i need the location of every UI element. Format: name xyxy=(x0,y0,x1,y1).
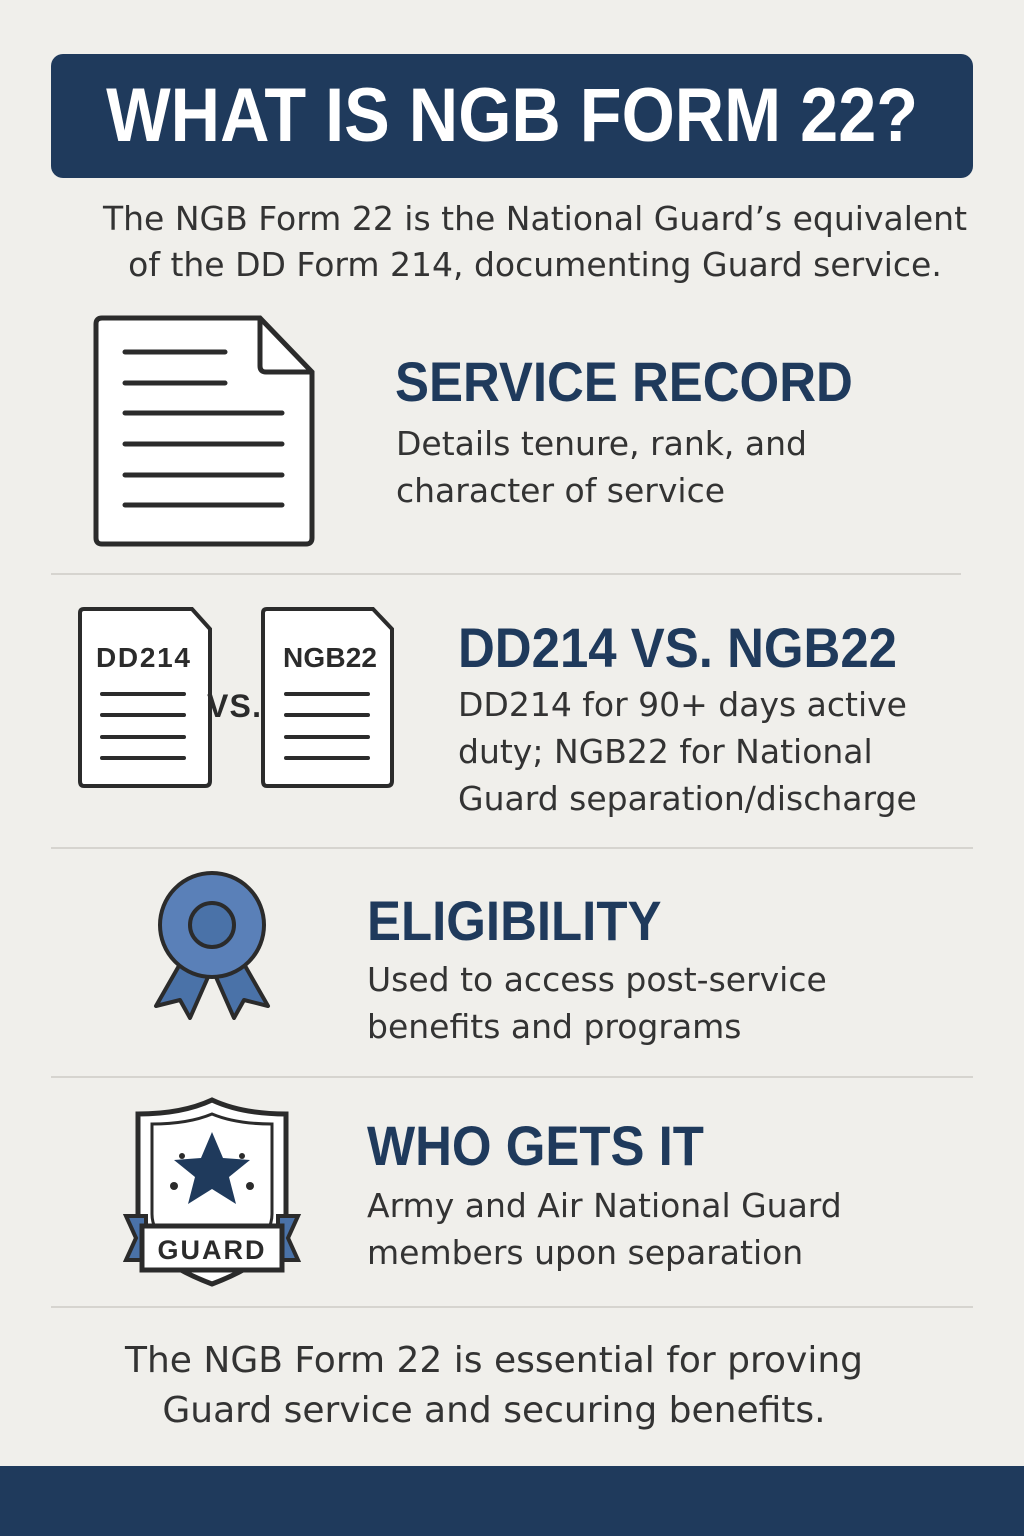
text: service record xyxy=(396,424,807,510)
intro text xyxy=(102,199,967,284)
text: eligibility xyxy=(367,960,827,1046)
icon: guard shield xyxy=(123,1097,301,1287)
text: eligibility: benefits and programs xyxy=(367,1007,742,1046)
text: dd214 vs ngb22 xyxy=(458,685,917,818)
intro text: of the DD Form 214, documenting Guard service. xyxy=(128,245,942,284)
text: service record: character of service xyxy=(396,471,725,510)
heading: eligibility: ELIGIBILITY xyxy=(367,889,661,952)
title banner: WHAT IS NGB FORM 22? xyxy=(106,73,918,158)
text: dd214 vs ngb22: Guard separation/discharge xyxy=(458,779,917,818)
text: dd214 vs ngb22: DD214 for 90+ days active xyxy=(458,685,907,724)
icon: guard shield: GUARD xyxy=(158,1235,266,1265)
icon: ribbon award xyxy=(154,871,270,1020)
bottom bar xyxy=(0,1466,1024,1536)
heading: who gets it: WHO GETS IT xyxy=(367,1114,704,1177)
text: dd214 vs ngb22: duty; NGB22 for National xyxy=(458,732,873,771)
icon: document xyxy=(94,316,314,546)
footer text xyxy=(124,1340,863,1431)
footer text: Guard service and securing benefits. xyxy=(162,1390,826,1431)
intro text: The NGB Form 22 is the National Guard’s equivalent xyxy=(103,199,967,238)
icon: DD214 vs NGB22: VS. xyxy=(207,688,261,724)
title banner xyxy=(51,54,973,178)
heading: service record: SERVICE RECORD xyxy=(395,350,853,413)
text: who gets it: Army and Air National Guard xyxy=(367,1186,842,1225)
text: eligibility: Used to access post-service xyxy=(367,960,827,999)
footer text: The NGB Form 22 is essential for proving xyxy=(125,1340,863,1381)
text: who gets it xyxy=(367,1186,842,1272)
icon: DD214 vs NGB22: NGB22 xyxy=(283,642,377,673)
heading: dd214 vs ngb22: DD214 VS. NGB22 xyxy=(458,616,897,679)
text: who gets it: members upon separation xyxy=(367,1233,803,1272)
text: service record: Details tenure, rank, and xyxy=(396,424,807,463)
icon: DD214 vs NGB22 xyxy=(78,607,394,788)
icon: DD214 vs NGB22: DD214 xyxy=(96,642,190,673)
